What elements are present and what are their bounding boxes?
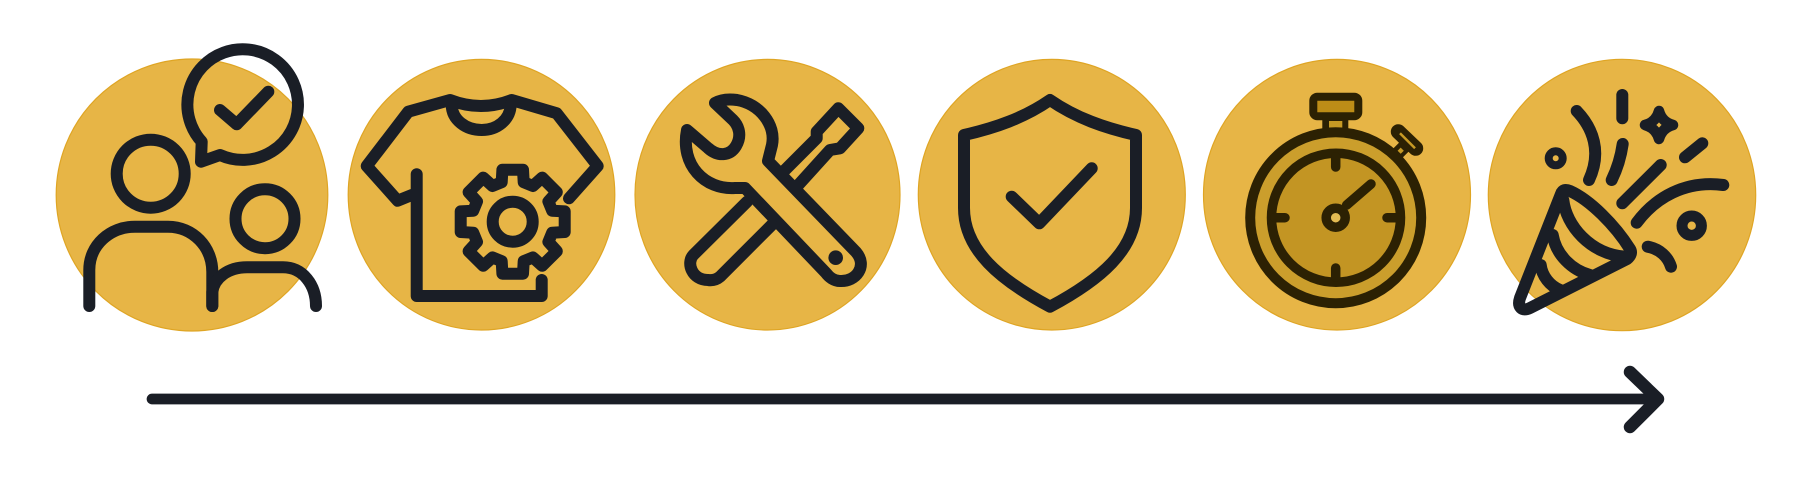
icon: shield with check bbox=[964, 100, 1136, 307]
icon: t-shirt with gear bbox=[367, 100, 598, 296]
popper band bbox=[1553, 235, 1590, 275]
stopwatch side button neck window bbox=[1398, 148, 1404, 154]
circle: customer step background bbox=[56, 59, 328, 331]
stopwatch side button slit bbox=[1400, 133, 1415, 148]
stopwatch hand bbox=[1347, 184, 1371, 205]
stopwatch face bbox=[1272, 153, 1400, 282]
confetti lower curve bbox=[1648, 247, 1671, 267]
second person body bbox=[212, 267, 316, 306]
speech bubble bbox=[187, 49, 298, 162]
confetti large streamer bbox=[1637, 184, 1723, 223]
popper lower band bbox=[1541, 265, 1560, 290]
confetti right ring bbox=[1682, 216, 1701, 235]
shield check mark bbox=[1012, 168, 1092, 223]
stopwatch hub bbox=[1326, 208, 1345, 227]
popper opening bbox=[1563, 200, 1625, 257]
t-shirt collar bbox=[452, 105, 511, 130]
t-shirt outline bbox=[367, 100, 598, 296]
gear hub bbox=[493, 202, 533, 242]
first person head bbox=[117, 140, 185, 208]
screwdriver handle bbox=[690, 202, 772, 280]
icon: party popper bbox=[1519, 95, 1723, 309]
circle: shield step background bbox=[918, 59, 1185, 330]
arrow: process direction bbox=[152, 372, 1658, 427]
shield outline bbox=[964, 100, 1136, 307]
stopwatch side button neck bbox=[1394, 145, 1406, 157]
confetti left ring bbox=[1549, 151, 1563, 165]
circle: tools step background bbox=[635, 59, 900, 330]
stopwatch outer ring bbox=[1250, 132, 1421, 303]
confetti curved streamer bbox=[1577, 111, 1595, 180]
stopwatch crown bbox=[1313, 97, 1358, 116]
arrow shaft bbox=[152, 394, 1655, 404]
stopwatch tick marks bbox=[1275, 157, 1397, 277]
arrow head bbox=[1630, 372, 1658, 427]
gear bbox=[461, 170, 565, 274]
circle: celebration step background bbox=[1488, 59, 1756, 331]
check mark in bubble bbox=[220, 92, 268, 124]
icon: people with approval speech bubble bbox=[89, 49, 316, 306]
wrench bbox=[686, 99, 861, 281]
stopwatch stem bbox=[1322, 117, 1348, 133]
popper cone bbox=[1519, 190, 1631, 309]
first person body bbox=[89, 227, 212, 306]
confetti small dash bbox=[1685, 143, 1702, 157]
confetti diagonal line bbox=[1622, 165, 1661, 203]
wrench hole bbox=[828, 250, 843, 265]
circle: t-shirt step background bbox=[348, 59, 615, 330]
circle: stopwatch step background bbox=[1204, 59, 1470, 330]
icon: stopwatch bbox=[1250, 97, 1421, 303]
confetti vertical dash bbox=[1616, 95, 1628, 118]
confetti short curve bbox=[1612, 144, 1623, 180]
confetti sparkle bbox=[1645, 111, 1673, 139]
second person head bbox=[236, 189, 294, 248]
stopwatch side button bbox=[1398, 132, 1416, 148]
icon: crossed wrench and screwdriver bbox=[686, 99, 861, 281]
screwdriver shaft and tip bbox=[785, 108, 858, 185]
